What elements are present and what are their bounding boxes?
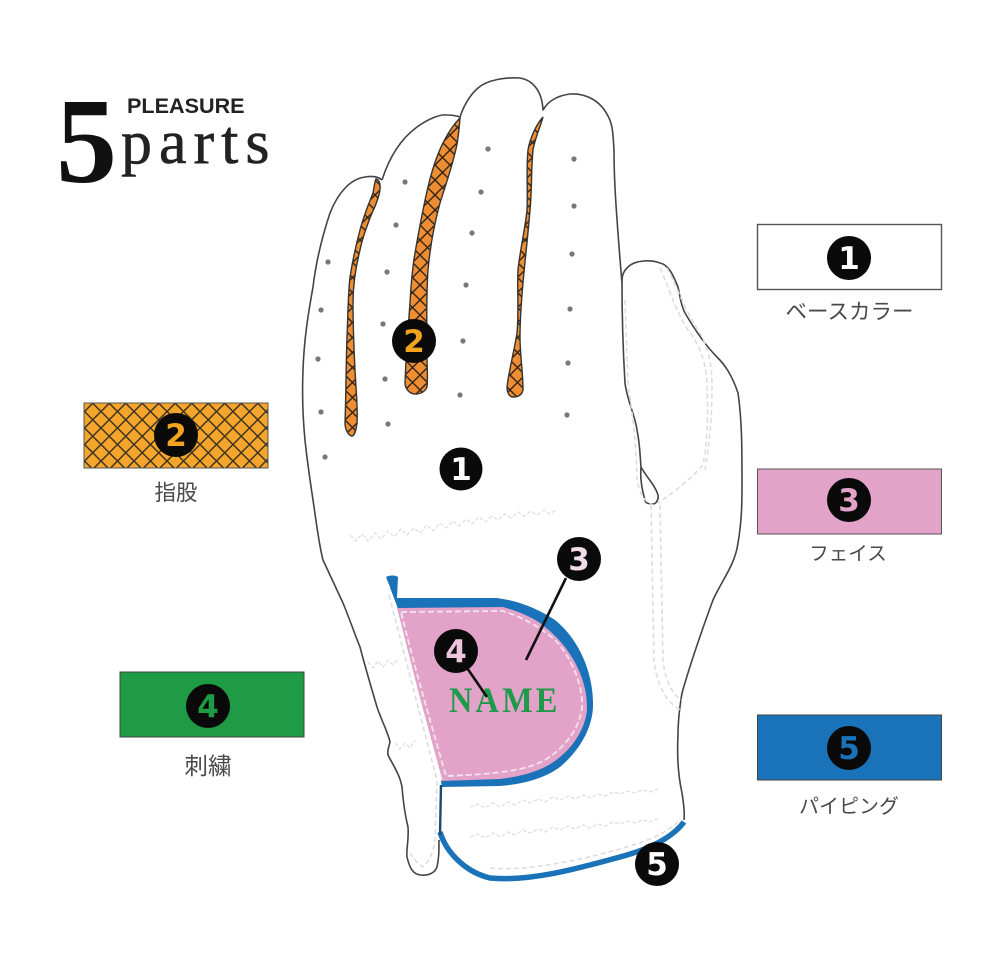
legend 1: base colour: ベースカラー	[786, 300, 913, 324]
title: 5 PLEASURE parts: 5	[56, 74, 117, 209]
thumb stitching	[625, 268, 712, 710]
left glove edge	[303, 176, 439, 875]
legend 3: face: 3	[838, 483, 860, 519]
palm and cuff zigzag stitching	[350, 509, 658, 838]
title: 5 PLEASURE parts	[56, 74, 277, 209]
marker 3 on glove: 3	[568, 542, 590, 578]
legend 3: face: フェイス	[809, 543, 887, 565]
thumb slit	[622, 283, 658, 504]
legend 5: piping: 5	[838, 731, 860, 767]
flap outer stitching	[389, 595, 437, 867]
marker 4 on glove: 4	[445, 634, 467, 670]
marker 1 on glove	[440, 448, 482, 490]
legend 1: base colour: 1	[838, 241, 860, 277]
marker 2 on glove	[392, 319, 436, 363]
legend 4: embroidery: 刺繍	[184, 753, 232, 779]
title: 5 PLEASURE parts: parts	[121, 109, 277, 177]
NAME embroidery: NAME	[449, 680, 561, 720]
leader line: 3	[526, 578, 566, 660]
flap seam	[388, 585, 441, 780]
finger gusset: right	[507, 117, 543, 397]
marker 3 on glove	[557, 537, 601, 581]
finger gusset: left	[345, 179, 380, 436]
face panel stitching	[401, 611, 582, 776]
marker 1 on glove: 1	[450, 452, 472, 488]
leader line: 4	[465, 665, 487, 697]
flap edge	[440, 785, 441, 835]
glove illustration	[303, 78, 742, 879]
legend 2: finger gusset: 指股	[154, 481, 198, 505]
legend 4: embroidery: 4	[197, 689, 219, 725]
cuff piping	[440, 822, 684, 879]
ventilation dots	[315, 146, 577, 460]
legend 5: piping	[758, 715, 942, 818]
finger gusset: centre	[405, 118, 460, 394]
cuff stitching	[490, 820, 680, 869]
legend 5: piping: パイピング	[799, 795, 899, 818]
legend 2: finger gusset: 2	[165, 418, 187, 454]
marker 2 on glove: 2	[403, 324, 425, 360]
title: 5 PLEASURE parts: PLEASURE	[127, 93, 245, 118]
marker 5 on glove: 5	[646, 847, 668, 883]
legend 2: finger gusset	[84, 403, 268, 505]
legend 1: base colour	[758, 224, 942, 324]
marker 4 on glove	[434, 629, 478, 673]
face panel	[397, 607, 587, 781]
marker 5 on glove	[635, 842, 679, 886]
glove outline	[382, 78, 742, 820]
legend 3: face	[758, 469, 942, 565]
face panel piping	[386, 576, 593, 787]
legend 4: embroidery	[120, 672, 304, 779]
